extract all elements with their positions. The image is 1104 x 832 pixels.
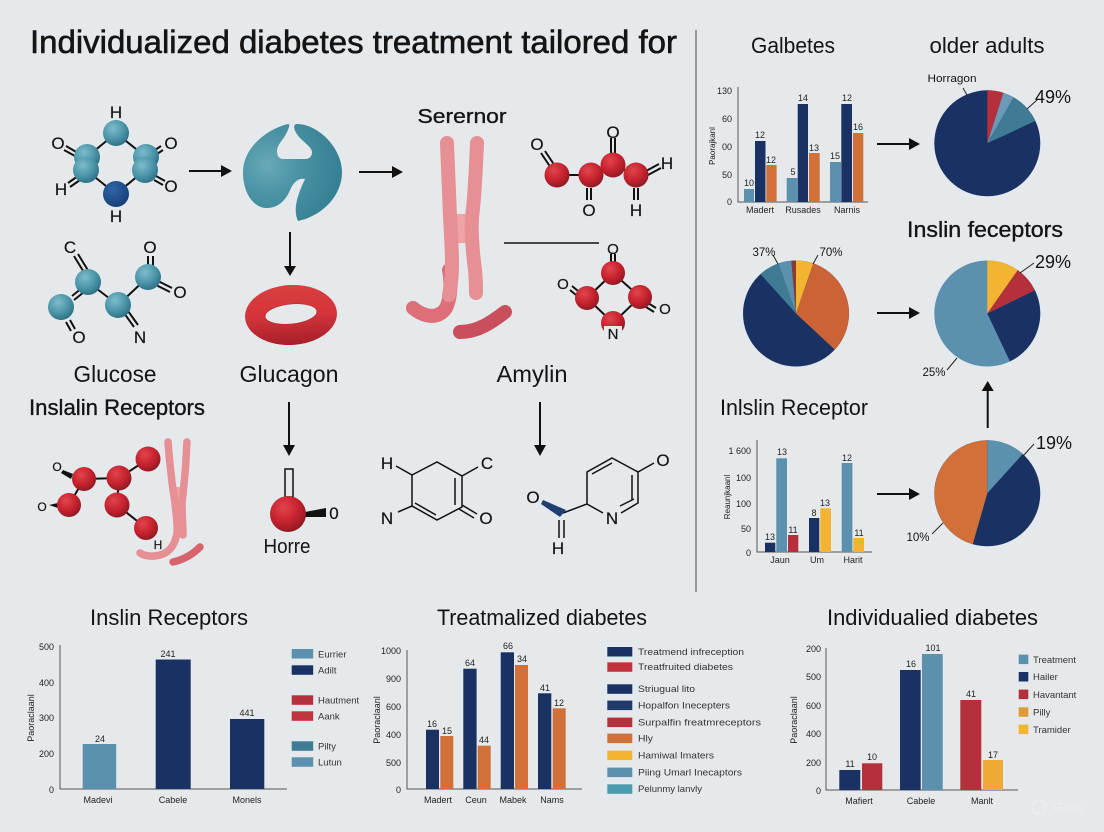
- icon: red hormone atom: 0: [329, 504, 339, 523]
- bar chart: Treatmalized diabetes: 600: [386, 702, 401, 712]
- bar chart: Inlslin Receptor: Reaunjkaanl: [723, 475, 732, 519]
- legend: Piing Umarl Inecaptors: [638, 768, 742, 778]
- molecule: line-drawn ring right: N: [606, 509, 618, 528]
- legend: Pilly: [1033, 708, 1051, 718]
- bar chart: Galbetes: 50: [722, 170, 732, 180]
- molecule: red chain: [530, 123, 673, 220]
- bar chart: Treatmalized diabetes: Mabek: [499, 795, 527, 805]
- molecule: line-drawn ring right: H: [552, 539, 564, 558]
- bar chart: Treatmalized diabetes: 400: [386, 730, 401, 740]
- pie chart: older adults: 49%: [1035, 87, 1071, 107]
- bar chart: Treatmalized diabetes: 44: [479, 735, 489, 745]
- bar chart: Inslin Receptors: Paoraclaanl: [26, 694, 36, 742]
- molecule: teal chain: N: [134, 328, 146, 347]
- molecule: teal ring: O: [164, 134, 178, 153]
- bar chart: Inlslin Receptor: 100: [736, 473, 751, 483]
- bar chart: Treatmalized diabetes: 34: [517, 654, 527, 664]
- connector line: [504, 242, 599, 244]
- bar chart: Treatmalized diabetes: Nams: [540, 795, 564, 805]
- bar chart: Galbetes: [708, 86, 868, 215]
- bar chart: Treatmalized diabetes: 0: [396, 785, 401, 795]
- bar chart: Galbetes: 13: [809, 143, 819, 153]
- watermark: Grok: Grok: [1053, 799, 1084, 815]
- bar chart: Galbetes: 10: [744, 178, 754, 188]
- bar chart: Inlslin Receptor: Um: [810, 555, 824, 565]
- legend: Hautment: [318, 696, 360, 706]
- bar chart: Inlslin Receptor: 1 600: [728, 446, 751, 456]
- bar chart: Inslin Receptors: Cabele: [159, 795, 187, 805]
- legend: Adilt: [318, 666, 337, 676]
- legend: Hamiwal Imaters: [638, 750, 714, 762]
- molecule: teal chain: C: [64, 238, 76, 257]
- pie chart: left multi-segment: 70%: [819, 247, 843, 259]
- pie chart: left multi-segment: [743, 247, 849, 366]
- molecule: red square ring: O: [659, 301, 671, 318]
- pie chart: insulin receptors: [922, 252, 1071, 379]
- legend: Treatfruited diabetes: [638, 662, 733, 673]
- molecule: red chain: O: [582, 201, 596, 220]
- bar chart: Galbetes: 12: [755, 130, 765, 140]
- pie chart: older adults: [928, 73, 1071, 196]
- pie chart: lower right: 10%: [906, 532, 930, 544]
- arrow: down to hormone: [283, 402, 295, 456]
- heading: Inslin Receptors: Inslin Receptors: [90, 605, 248, 630]
- bar chart: Individualied diabetes: Paoraclaanl: [789, 696, 799, 744]
- bar chart: Inlslin Receptor: 13: [820, 498, 830, 508]
- molecule: red square ring: [557, 241, 671, 343]
- bar chart: Galbetes: 16: [853, 122, 863, 132]
- bar chart: Galbetes: 15: [830, 151, 840, 161]
- molecule: line-drawn ring left: N: [381, 509, 393, 528]
- bar chart: Inlslin Receptor: [723, 440, 872, 565]
- legend: Lutun: [318, 758, 342, 768]
- bar chart: Treatmalized diabetes: Madert: [424, 795, 453, 805]
- bar chart: Individualied diabetes: 500: [806, 672, 821, 682]
- icon: pink receptor: [413, 143, 505, 332]
- legend: Pilty: [318, 742, 336, 752]
- pie chart: lower right: [906, 433, 1072, 546]
- bar chart: Individualied diabetes: 200: [806, 758, 821, 768]
- watermark: Grok: [1032, 799, 1084, 815]
- pie chart: older adults: Horragon: [928, 73, 976, 85]
- bar chart: Inslin Receptors: 300: [39, 713, 54, 723]
- arrow: down to ring structures: [534, 402, 546, 456]
- molecule: teal ring: O: [164, 177, 178, 196]
- molecule: teal ring: H: [110, 103, 122, 122]
- bar chart: Galbetes: 130: [717, 86, 732, 96]
- bar chart: Treatmalized diabetes: 64: [465, 658, 475, 668]
- divider between molecule panel and chart panel: [695, 30, 697, 592]
- bar chart: Galbetes: 0: [727, 197, 732, 207]
- heading: Inlslin Receptor: Inlslin Receptor: [720, 395, 868, 420]
- bar chart: Individualied diabetes: [789, 643, 1018, 806]
- molecule: line-drawn ring right: [526, 451, 670, 558]
- arrow: blob to receptor: [359, 166, 403, 178]
- bar chart: Treatmalized diabetes: 41: [540, 683, 550, 693]
- bar chart: Treatmalized diabetes: [372, 641, 582, 805]
- bar chart: Inlslin Receptor: 100: [736, 499, 751, 509]
- bar chart: Inslin Receptors: 0: [49, 785, 54, 795]
- bar chart: Inlslin Receptor: 13: [777, 447, 787, 457]
- bar chart: Galbetes: 12: [842, 93, 852, 103]
- molecule: red branched cluster: [37, 446, 162, 552]
- bar chart: Inslin Receptors: 500: [39, 642, 54, 652]
- molecule: teal ring: O: [51, 134, 65, 153]
- molecule: teal chain: O: [72, 328, 86, 347]
- panel: bottom right chart: [789, 605, 1077, 806]
- bar chart: Inslin Receptors: 24: [95, 734, 105, 744]
- bar chart: Inslin Receptors: 400: [39, 678, 54, 688]
- heading: Individualied diabetes: Individualied diabetes: [827, 605, 1038, 630]
- bar chart: Individualied diabetes: 200: [806, 644, 821, 654]
- icon: red hormone atom: [270, 469, 339, 532]
- bar chart: Inlslin Receptor: Jaun: [770, 555, 790, 565]
- bar chart: Treatmalized diabetes: 15: [442, 726, 452, 736]
- molecule: red chain: H: [630, 201, 642, 220]
- bar chart: Galbetes: 60: [722, 114, 732, 124]
- bar chart: Galbetes: Rusades: [785, 205, 821, 215]
- arrow: chart to pie: [877, 488, 920, 500]
- bar chart: Individualied diabetes: Mafiert: [845, 796, 873, 806]
- bar chart: Galbetes: Madert: [746, 205, 775, 215]
- molecule: red square ring: O: [607, 241, 619, 258]
- molecule: teal chain: [48, 238, 187, 347]
- molecule: line-drawn ring left: O: [479, 509, 493, 528]
- bar chart: Galbetes: 14: [798, 93, 808, 103]
- icon: red glucagon torus: [243, 283, 339, 347]
- bar chart: Treatmalized diabetes: 1000: [381, 646, 401, 656]
- legend: Eurrier: [318, 650, 347, 660]
- bar chart: Treatmalized diabetes: Paoraclaanl: [372, 696, 382, 744]
- bar chart: Treatmalized diabetes: 900: [386, 674, 401, 684]
- bar chart: Galbetes: 5: [790, 167, 796, 177]
- arrow: up to receptors pie: [982, 381, 994, 428]
- pie chart: left multi-segment: 37%: [752, 247, 776, 259]
- bar chart: Individualied diabetes: 0: [816, 786, 821, 796]
- molecule: teal ring: [51, 103, 178, 226]
- label: Amylin: Amylin: [496, 361, 568, 387]
- bar chart: Individualied diabetes: 16: [906, 659, 916, 669]
- legend: Hopalfon Inecepters: [638, 700, 730, 712]
- bar chart: Inslin Receptors: Monels: [232, 795, 262, 805]
- legend: Aank: [318, 712, 340, 722]
- bar chart: Individualied diabetes: 101: [925, 643, 941, 653]
- bar chart: Inlslin Receptor: 50: [741, 524, 751, 534]
- bar chart: Treatmalized diabetes: Ceun: [465, 795, 487, 805]
- molecule: teal chain: O: [143, 238, 157, 257]
- molecule: red branched cluster: O: [37, 500, 47, 514]
- label: Horre: Horre: [264, 536, 310, 558]
- bar chart: Inlslin Receptor: 12: [842, 453, 852, 463]
- arrow: ring to blob: [189, 165, 232, 177]
- panel: bottom middle chart: [372, 605, 761, 805]
- bar chart: Individualied diabetes: 41: [966, 689, 976, 699]
- bar chart: Galbetes: Paorajkanl: [708, 127, 717, 165]
- bar chart: Inslin Receptors: 241: [160, 649, 176, 659]
- legend: [292, 649, 360, 768]
- pie chart: lower right: 19%: [1036, 433, 1072, 453]
- molecule: teal ring: H: [55, 180, 67, 199]
- arrow: left pie to right pie: [877, 307, 920, 319]
- bar chart: Individualied diabetes: 400: [806, 729, 821, 739]
- bar chart: Treatmalized diabetes: 12: [554, 698, 564, 708]
- arrow: blob to torus: [284, 232, 296, 276]
- heading: Serernor: Serernor: [418, 106, 507, 128]
- bar chart: Inslin Receptors: 200: [39, 749, 54, 759]
- bar chart: Inlslin Receptor: 8: [811, 508, 817, 518]
- molecule: red branched cluster: O: [52, 460, 62, 474]
- label: Glucagon: Glucagon: [240, 361, 338, 387]
- bar chart: Inlslin Receptor: 0: [746, 548, 751, 558]
- legend: Havantant: [1033, 690, 1077, 701]
- legend: Treatmend infreception: [638, 647, 744, 658]
- legend: Treatment: [1033, 655, 1076, 666]
- molecule: red chain: H: [661, 154, 673, 173]
- pie chart: insulin receptors: 29%: [1035, 252, 1071, 272]
- molecule: line-drawn ring right: O: [526, 488, 540, 507]
- molecule: line-drawn ring left: [381, 454, 493, 528]
- bar chart: Individualied diabetes: 600: [806, 701, 821, 711]
- molecule: teal ring: H: [110, 207, 122, 226]
- molecule: red chain: O: [606, 123, 620, 142]
- bar chart: Individualied diabetes: 10: [867, 752, 877, 762]
- panel: right side charts: [708, 33, 1072, 565]
- molecule: line-drawn ring left: C: [481, 454, 493, 473]
- molecule: teal chain: O: [173, 283, 187, 302]
- legend: Surpalfin freatmreceptors: [638, 718, 761, 728]
- bar chart: Inlslin Receptor: Harit: [843, 555, 863, 565]
- bar chart: Galbetes: Narnis: [834, 205, 860, 215]
- heading: Galbetes: Galbetes: [751, 33, 835, 58]
- molecule: line-drawn ring left: H: [381, 454, 393, 473]
- bar chart: Galbetes: 00: [722, 142, 732, 152]
- bar chart: Inslin Receptors: 441: [239, 708, 255, 718]
- heading: Inslalin Receptors: Inslalin Receptors: [29, 395, 205, 420]
- legend: Tramider: [1033, 725, 1071, 736]
- icon: teal insulin protein: [243, 124, 342, 221]
- legend: [607, 647, 761, 795]
- legend: Hailer: [1033, 672, 1058, 683]
- bar chart: Individualied diabetes: Manlt: [971, 796, 993, 806]
- legend: Hly: [638, 734, 653, 744]
- molecule: red square ring: N: [608, 326, 618, 343]
- title: Individualized diabetes treatment tailored for: [30, 24, 677, 60]
- bar chart: Individualied diabetes: Cabele: [907, 796, 935, 806]
- molecule: red chain: O: [530, 135, 544, 154]
- panel: bottom left chart: [26, 605, 360, 805]
- legend: Pelunmy lanvly: [638, 784, 702, 795]
- heading: Inslin feceptors: Inslin feceptors: [907, 217, 1063, 242]
- heading: older adults: older adults: [930, 33, 1044, 58]
- bar chart: Inslin Receptors: [26, 642, 287, 805]
- bar chart: Inlslin Receptor: 13: [765, 532, 775, 542]
- bar chart: Treatmalized diabetes: 500: [386, 758, 401, 768]
- bar chart: Inslin Receptors: Madevi: [83, 795, 113, 805]
- bar chart: Inlslin Receptor: 11: [854, 528, 864, 538]
- pie chart: insulin receptors: 25%: [922, 367, 946, 379]
- molecule: line-drawn ring right: O: [656, 451, 670, 470]
- bar chart: Treatmalized diabetes: 16: [427, 719, 437, 729]
- bar chart: Treatmalized diabetes: 66: [503, 641, 513, 651]
- icon: small pink receptor: [140, 442, 200, 562]
- molecule: red branched cluster: H: [154, 538, 162, 552]
- bar chart: Individualied diabetes: 17: [988, 750, 998, 760]
- bar chart: Inlslin Receptor: 11: [788, 525, 798, 535]
- heading: Treatmalized diabetes: Treatmalized diabetes: [437, 605, 647, 630]
- label: Glucose: Glucose: [74, 361, 156, 387]
- legend: [1019, 655, 1077, 736]
- legend: Striugual lito: [638, 684, 695, 695]
- arrow: chart to pie: [877, 138, 920, 150]
- molecule: red square ring: O: [557, 276, 569, 293]
- bar chart: Galbetes: 12: [766, 155, 776, 165]
- panel: molecules and hormones: [29, 103, 673, 562]
- bar chart: Individualied diabetes: 11: [845, 759, 855, 769]
